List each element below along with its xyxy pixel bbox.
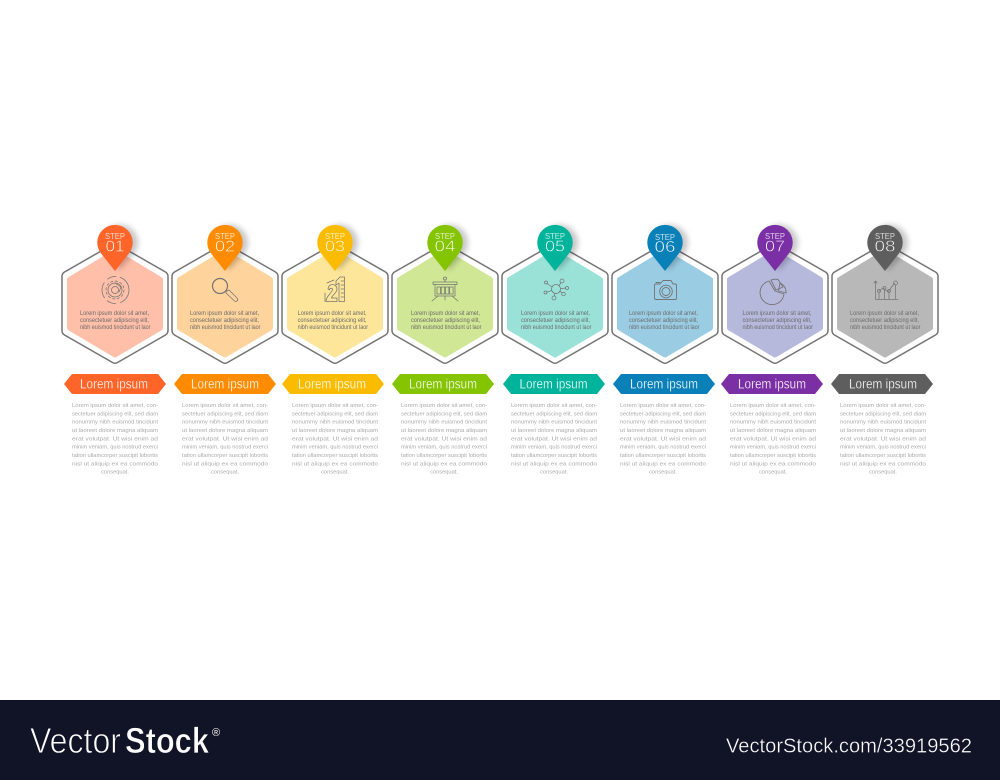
pin 4 (427, 225, 463, 271)
description 2: ut laoreet dolore magna aliquam (182, 428, 268, 434)
step 1 panel (62, 225, 168, 476)
hexagon text 3: nibh euismod tincidunt ut laor (298, 324, 368, 331)
hexagon text 1 (80, 310, 150, 331)
step label 2: STEP (215, 231, 235, 241)
hexagon text 5 (521, 310, 592, 331)
hexagon text 5: consectetuer adipiscing elit, (521, 317, 590, 324)
description 7: ut laoreet dolore magna aliquam (730, 428, 816, 434)
step label 4: STEP (435, 231, 455, 241)
description 1: nisl ut aliquip ex ea commodo (72, 461, 158, 467)
description 5: ut laoreet dolore magna aliquam (511, 428, 597, 434)
banner 4 (392, 374, 494, 394)
description 1: erat volutpat. Ut wisi enim ad (72, 436, 158, 442)
step 2 panel (172, 225, 278, 476)
description 4: erat volutpat. Ut wisi enim ad (401, 436, 487, 442)
description 3: nisl ut aliquip ex ea commodo (292, 461, 378, 467)
hexagon text 4: Lorem ipsum dolor sit amet, (411, 310, 480, 317)
description 8: sectetuer adipiscing elit, sed diam (840, 411, 926, 417)
icon: ranking numbers (325, 277, 344, 302)
step 6 panel (612, 225, 718, 476)
hexagon text 6 (629, 310, 700, 331)
hexagon fill 6 (620, 252, 710, 355)
step number 1: 01 (106, 238, 124, 256)
pin shadow 4 (432, 225, 468, 270)
description 3: tation ullamcorper suscipit lobortis (292, 453, 378, 459)
banner 6 (613, 374, 715, 394)
description 2 (182, 403, 268, 476)
banner title 8: Lorem ipsum (849, 376, 917, 392)
banner 7 (721, 374, 823, 394)
hexagon text 6: nibh euismod tincidunt ut laor (629, 324, 700, 331)
description 5: consequat. (540, 470, 568, 476)
hexagon text 4: nibh euismod tincidunt ut laor (411, 324, 482, 331)
hexagon text 4: consectetuer adipiscing elit, (411, 317, 480, 324)
description 7: minim veniam, quis nostrud exerci (730, 445, 816, 451)
step 5 panel (502, 225, 608, 476)
description 7 (730, 403, 816, 476)
step number 8: 08 (874, 238, 896, 256)
description 6: consequat. (649, 470, 677, 476)
pin shadow 7 (762, 225, 798, 270)
pin shadow 1 (102, 225, 138, 270)
description 3: ut laoreet dolore magna aliquam (292, 428, 378, 434)
banner 3 (282, 374, 384, 394)
pin 5 (537, 225, 573, 271)
hexagon text 5: Lorem ipsum dolor sit amet, (521, 310, 590, 317)
description 7: nonummy nibh euismod tincidunt (730, 420, 816, 426)
description 3: erat volutpat. Ut wisi enim ad (292, 436, 378, 442)
banner title 2: Lorem ipsum (191, 376, 259, 392)
pin 3 (317, 225, 353, 271)
footer logo bold word: Stock (125, 720, 210, 761)
registered mark: ® (212, 727, 220, 739)
icon: gear (102, 276, 129, 304)
step 7 panel (721, 225, 828, 476)
description 7: erat volutpat. Ut wisi enim ad (730, 436, 816, 442)
pin shadow 2 (212, 225, 248, 270)
description 1 (72, 403, 158, 476)
description 4: sectetuer adipiscing elit, sed diam (401, 411, 487, 417)
description 4 (401, 403, 487, 476)
description 7: Lorem ipsum dolor sit amet, con- (730, 403, 816, 409)
hexagon text 8 (850, 310, 920, 331)
hexagon text 3 (298, 310, 368, 331)
step label 6: STEP (655, 232, 675, 242)
pin 6 (647, 225, 683, 271)
description 2: erat volutpat. Ut wisi enim ad (182, 436, 268, 442)
description 6: tation ullamcorper suscipit lobortis (620, 453, 706, 459)
hexagon outline 6 (612, 244, 718, 363)
hexagon outline 3 (282, 244, 388, 363)
description 1: consequat. (101, 470, 129, 476)
description 8: erat volutpat. Ut wisi enim ad (840, 436, 926, 442)
step 3 panel (282, 225, 388, 476)
icon: presentation board (432, 277, 458, 301)
hexagon fill 8 (840, 252, 930, 355)
description 2: minim veniam, quis nostrud exerci (182, 445, 268, 451)
description 8: nisl ut aliquip ex ea commodo (840, 461, 926, 467)
description 6: ut laoreet dolore magna aliquam (620, 428, 706, 434)
hexagon text 2 (190, 310, 260, 331)
pin shadow 3 (322, 225, 358, 270)
step label 5: STEP (545, 231, 565, 241)
hexagon text 5: nibh euismod tincidunt ut laor (521, 324, 592, 331)
description 4: tation ullamcorper suscipit lobortis (401, 453, 487, 459)
description 2: sectetuer adipiscing elit, sed diam (182, 411, 268, 417)
hexagon outline 5 (502, 244, 608, 363)
hexagon text 4 (411, 310, 482, 331)
pin 1 (97, 225, 133, 271)
hexagon text 7: nibh euismod tincidunt ut laor (742, 324, 813, 331)
pin 8 (867, 225, 903, 271)
hexagon text 2: consectetuer adipiscing elit, (190, 317, 259, 324)
description 4: nisl ut aliquip ex ea commodo (401, 461, 487, 467)
hexagon text 2: Lorem ipsum dolor sit amet, (190, 310, 259, 317)
hexagon fill 7 (730, 252, 820, 355)
description 5 (511, 403, 597, 476)
description 3: sectetuer adipiscing elit, sed diam (292, 411, 378, 417)
description 1: minim veniam, quis nostrud exerci (72, 445, 158, 451)
step number 5: 05 (545, 238, 565, 256)
description 3: minim veniam, quis nostrud exerci (292, 445, 378, 451)
icon: magnifier (212, 278, 238, 301)
hexagon fill 5 (510, 252, 600, 355)
description 6: nonummy nibh euismod tincidunt (620, 420, 706, 426)
description 4: ut laoreet dolore magna aliquam (401, 428, 487, 434)
banner title 5: Lorem ipsum (520, 376, 588, 392)
description 2: tation ullamcorper suscipit lobortis (182, 453, 268, 459)
hexagon text 1: consectetuer adipiscing elit, (80, 317, 149, 324)
footer logo light word: Vector (30, 720, 121, 761)
description 7: nisl ut aliquip ex ea commodo (730, 461, 816, 467)
banner title 7: Lorem ipsum (738, 376, 806, 392)
hexagon text 3: Lorem ipsum dolor sit amet, (298, 310, 367, 317)
hexagon text 8: Lorem ipsum dolor sit amet, (850, 310, 919, 317)
hexagon text 2: nibh euismod tincidunt ut laor (190, 324, 260, 331)
pin shadow 8 (872, 225, 908, 270)
footer image id: VectorStock.com/33919562 (726, 736, 972, 758)
banner title 4: Lorem ipsum (409, 376, 477, 392)
description 3: nonummy nibh euismod tincidunt (292, 420, 378, 426)
description 2: consequat. (211, 470, 239, 476)
hexagon outline 2 (172, 244, 278, 363)
pin shadow 5 (542, 225, 578, 270)
description 8: consequat. (869, 470, 897, 476)
banner 2 (174, 374, 276, 394)
description 1: ut laoreet dolore magna aliquam (72, 428, 158, 434)
icon: camera (654, 280, 676, 300)
banner 8 (831, 374, 933, 394)
banner 5 (503, 374, 605, 394)
step 4 panel (392, 225, 498, 476)
step number 3: 03 (325, 238, 345, 256)
description 8: nonummy nibh euismod tincidunt (840, 420, 926, 426)
hexagon outline 7 (722, 244, 828, 363)
description 2: nisl ut aliquip ex ea commodo (182, 461, 268, 467)
description 1: nonummy nibh euismod tincidunt (72, 420, 158, 426)
hexagon fill 3 (290, 252, 380, 355)
description 3: Lorem ipsum dolor sit amet, con- (292, 403, 378, 409)
hexagon text 7: Lorem ipsum dolor sit amet, (742, 310, 812, 317)
description 6: Lorem ipsum dolor sit amet, con- (620, 403, 706, 409)
description 5: nonummy nibh euismod tincidunt (511, 420, 597, 426)
description 6: minim veniam, quis nostrud exerci (620, 445, 706, 451)
icon: network nodes (544, 279, 568, 300)
step 8 panel (831, 225, 938, 476)
description 1: sectetuer adipiscing elit, sed diam (72, 411, 158, 417)
description 2: nonummy nibh euismod tincidunt (182, 420, 268, 426)
description 2: Lorem ipsum dolor sit amet, con- (182, 403, 268, 409)
hexagon fill 4 (400, 252, 490, 355)
step label 3: STEP (325, 231, 345, 241)
step number 7: 07 (765, 238, 785, 256)
step number 6: 06 (654, 239, 676, 256)
description 5: nisl ut aliquip ex ea commodo (511, 461, 597, 467)
banner 1 (64, 374, 166, 394)
description 4: minim veniam, quis nostrud exerci (401, 445, 487, 451)
description 5: sectetuer adipiscing elit, sed diam (511, 411, 597, 417)
banner title 6: Lorem ipsum (630, 376, 698, 392)
description 7: consequat. (759, 470, 787, 476)
description 4: Lorem ipsum dolor sit amet, con- (401, 403, 487, 409)
step label 8: STEP (875, 231, 895, 241)
description 7: sectetuer adipiscing elit, sed diam (730, 411, 816, 417)
pin shadow 6 (652, 225, 688, 270)
step number 2: 02 (215, 238, 235, 256)
hexagon fill 1 (70, 252, 160, 355)
hexagon outline 1 (62, 244, 168, 363)
hexagon text 3: consectetuer adipiscing elit, (298, 317, 367, 324)
hexagon text 7: consectetuer adipiscing elit, (742, 317, 812, 324)
footer bar (0, 700, 1000, 780)
description 1: Lorem ipsum dolor sit amet, con- (72, 403, 158, 409)
description 5: erat volutpat. Ut wisi enim ad (511, 436, 597, 442)
hexagon text 1: Lorem ipsum dolor sit amet, (80, 310, 149, 317)
hexagon text 6: Lorem ipsum dolor sit amet, (629, 310, 698, 317)
description 8: ut laoreet dolore magna aliquam (840, 428, 926, 434)
step label 7: STEP (765, 231, 785, 241)
description 3: consequat. (321, 470, 349, 476)
hexagon text 6: consectetuer adipiscing elit, (629, 317, 698, 324)
description 6 (620, 403, 706, 476)
step number 4: 04 (434, 238, 456, 256)
description 8: minim veniam, quis nostrud exerci (840, 445, 926, 451)
banner title 1: Lorem ipsum (80, 376, 148, 392)
icon: line chart (874, 281, 898, 300)
description 5: minim veniam, quis nostrud exerci (511, 445, 597, 451)
banner title 3: Lorem ipsum (298, 376, 366, 392)
description 8: tation ullamcorper suscipit lobortis (840, 453, 926, 459)
description 4: nonummy nibh euismod tincidunt (401, 420, 487, 426)
description 1: tation ullamcorper suscipit lobortis (72, 453, 158, 459)
description 6: sectetuer adipiscing elit, sed diam (620, 411, 706, 417)
hexagon text 8: nibh euismod tincidunt ut laor (850, 324, 920, 331)
description 8 (840, 403, 926, 476)
hexagon text 8: consectetuer adipiscing elit, (850, 317, 919, 324)
description 7: tation ullamcorper suscipit lobortis (730, 453, 816, 459)
description 5: Lorem ipsum dolor sit amet, con- (511, 403, 597, 409)
hexagon text 1: nibh euismod tincidunt ut laor (80, 324, 150, 331)
hexagon fill 2 (180, 252, 270, 355)
description 6: nisl ut aliquip ex ea commodo (620, 461, 706, 467)
description 3 (292, 403, 378, 476)
description 6: erat volutpat. Ut wisi enim ad (620, 436, 706, 442)
hexagon outline 4 (392, 244, 498, 363)
hexagon outline 8 (832, 244, 938, 363)
pin 2 (207, 225, 243, 271)
description 8: Lorem ipsum dolor sit amet, con- (840, 403, 926, 409)
step label 1: STEP (105, 231, 125, 241)
pin 7 (757, 225, 793, 271)
description 4: consequat. (430, 470, 458, 476)
description 5: tation ullamcorper suscipit lobortis (511, 453, 597, 459)
hexagon text 7 (742, 310, 813, 331)
icon: pie chart (760, 279, 786, 305)
